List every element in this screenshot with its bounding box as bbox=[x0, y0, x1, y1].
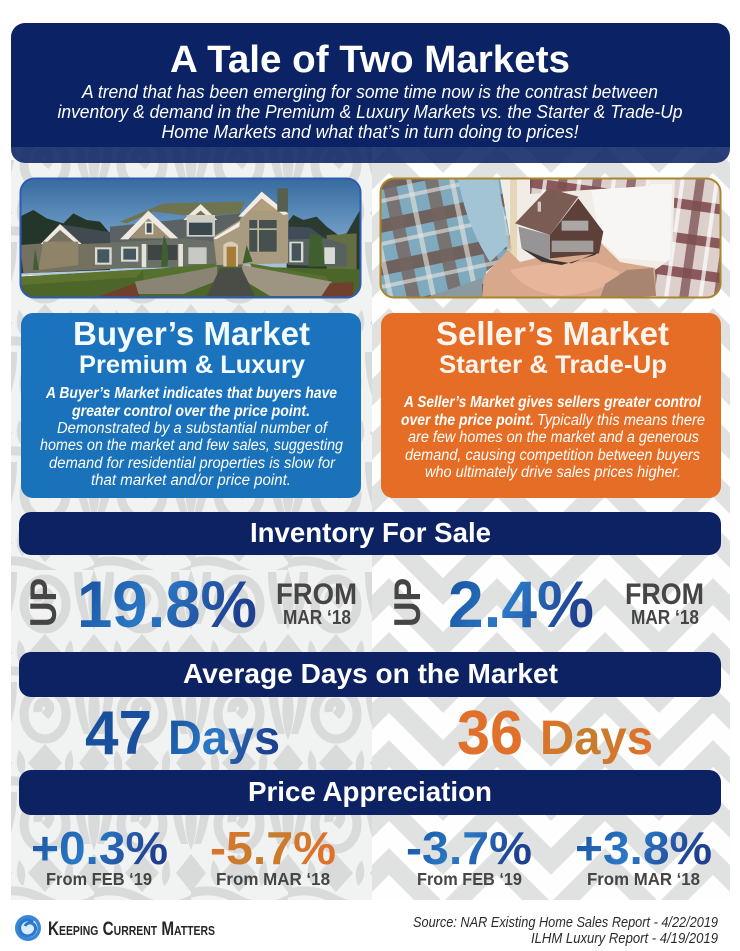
stat: 36 days bbox=[457, 699, 653, 768]
label: from: FROM bbox=[625, 578, 704, 611]
buyer's market description: that market and/or price point. bbox=[91, 472, 291, 489]
label: up: UP bbox=[387, 578, 428, 627]
subheading: premium and luxury: Premium & Luxury bbox=[79, 351, 305, 379]
stat: 47 days: 47 bbox=[85, 699, 152, 768]
source citation: ILHM Luxury Report - 4/19/2019 bbox=[531, 931, 718, 947]
source citation bbox=[413, 915, 718, 947]
heading: seller's market: Seller’s Market bbox=[436, 315, 669, 352]
right shirt bbox=[530, 178, 650, 194]
stat: -5.7% from mar '18: From MAR ‘18 bbox=[216, 869, 330, 889]
label: up: UP bbox=[23, 578, 64, 627]
value: 2.4%: 2.4% bbox=[448, 567, 594, 641]
label: mar '18: MAR ‘18 bbox=[631, 607, 699, 629]
intro text: A trend that has been emerging for some time now is the contrast between bbox=[81, 82, 658, 102]
panel: seller's market bbox=[381, 313, 721, 498]
model house bbox=[515, 188, 603, 265]
panel: buyer's market bbox=[21, 313, 361, 498]
intro text bbox=[58, 82, 682, 142]
seller's market description: A Seller’s Market gives sellers greater control bbox=[403, 394, 702, 411]
photo: luxury house bbox=[20, 178, 362, 298]
section bar: price appreciation: Price Appreciation bbox=[248, 776, 492, 807]
stat: buyer's inventory up 19.8% bbox=[23, 567, 357, 641]
stat: 36 days: 36 bbox=[457, 699, 523, 768]
icon: keeping current matters logo bbox=[15, 915, 41, 941]
buyer's market description: greater control over the price point. bbox=[71, 403, 310, 420]
brand name: Keeping Current Matters bbox=[48, 919, 215, 940]
header banner bbox=[11, 23, 730, 163]
section bar: average days on the market: Average Days on the Market bbox=[183, 658, 558, 689]
seller's market description: Typically this means there bbox=[537, 412, 705, 429]
title: A Tale of Two Markets bbox=[170, 39, 570, 81]
buyer's market description: homes on the market and few sales, suggesting bbox=[40, 437, 343, 454]
seller's market description bbox=[401, 394, 705, 481]
seller's market description: over the price point. bbox=[401, 412, 534, 429]
section bar: inventory for sale bbox=[19, 512, 721, 555]
buyer's market description: demand for residential properties is slow for bbox=[49, 455, 336, 472]
intro text: inventory & demand in the Premium & Luxury Markets vs. the Starter & Trade-Up bbox=[58, 102, 682, 122]
stat: +0.3% from feb '19: From FEB ‘19 bbox=[46, 869, 152, 889]
buyer's market description: A Buyer’s Market indicates that buyers have bbox=[45, 385, 337, 402]
left shirt bbox=[380, 178, 512, 298]
stat: seller's inventory up 2.4% bbox=[387, 567, 704, 641]
background pattern: seller's side chevron bbox=[372, 160, 730, 900]
subheading: starter and trade-up: Starter & Trade-Up bbox=[439, 351, 667, 379]
section bar: average days on the market bbox=[19, 652, 721, 697]
header pattern showing through bbox=[11, 147, 730, 163]
arms and hands bbox=[482, 242, 656, 298]
white shirt bbox=[590, 184, 672, 262]
seller's market description: demand, causing competition between buyers bbox=[405, 447, 700, 464]
intro text: Home Markets and what that’s in turn doing to prices! bbox=[162, 122, 578, 142]
section bar: inventory for sale: Inventory For Sale bbox=[250, 517, 491, 548]
stat: +0.3% from feb '19: +0.3% bbox=[31, 822, 168, 874]
stat: +3.8% from mar '18: From MAR ‘18 bbox=[587, 869, 700, 889]
heading: buyer's market: Buyer’s Market bbox=[73, 315, 310, 352]
background pattern: buyer's side damask bbox=[11, 160, 372, 900]
stat: 36 days: Days bbox=[540, 712, 653, 765]
stat: 47 days bbox=[85, 699, 280, 768]
seller's market description: who ultimately drive sales prices higher. bbox=[425, 464, 681, 481]
stat: -3.7% from feb '19: -3.7% bbox=[406, 822, 532, 874]
stat: -3.7% from feb '19: From FEB ‘19 bbox=[417, 869, 522, 889]
buyer's market description bbox=[40, 385, 343, 489]
value: 19.8%: 19.8% bbox=[77, 567, 257, 641]
label: from: FROM bbox=[276, 578, 357, 611]
photo: hands holding a model house bbox=[380, 178, 721, 298]
stat: +3.8% from mar '18: +3.8% bbox=[575, 822, 712, 874]
stat: 47 days: Days bbox=[168, 712, 280, 765]
section bar: price appreciation bbox=[19, 770, 721, 815]
buyer's market description: Demonstrated by a substantial number of bbox=[57, 420, 329, 437]
stat: -5.7% from mar '18: -5.7% bbox=[210, 822, 336, 874]
seller's market description: are few homes on the market and a generous bbox=[408, 429, 699, 446]
label: mar '18: MAR ‘18 bbox=[283, 607, 351, 629]
